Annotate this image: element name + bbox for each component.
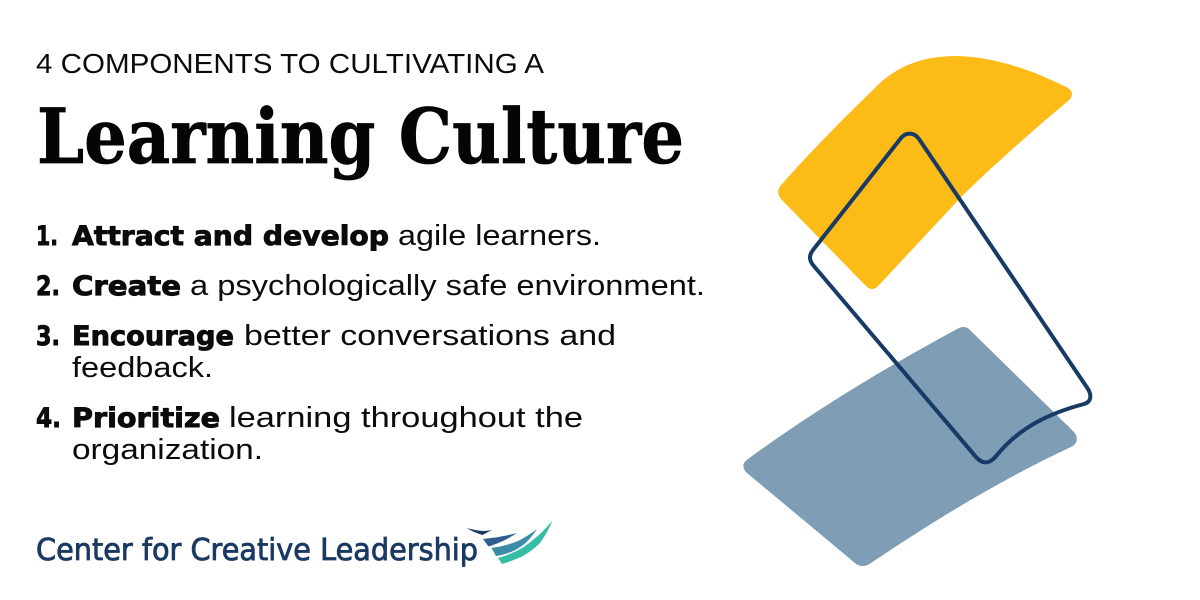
list item 2: a psychologically safe environment.: [190, 270, 705, 302]
heading: eyebrow: 4 COMPONENTS TO CULTIVATING A: [36, 48, 544, 79]
list item 1: Attract and develop: [72, 221, 389, 252]
graphic: abstract shapes: [743, 56, 1090, 566]
list item 3: [36, 320, 616, 384]
list item 1: [36, 220, 601, 252]
numbered list: [36, 220, 705, 466]
list item 2: 2.: [36, 271, 60, 302]
shape: navy outline: [810, 134, 1090, 462]
list item 4: organization.: [72, 434, 263, 466]
list item 3: better conversations and: [244, 320, 616, 352]
list item 3: Encourage: [72, 321, 234, 352]
logo icon: swoosh: [466, 520, 552, 564]
list item 2: Create: [72, 271, 181, 302]
shape: slate blue: [743, 327, 1077, 566]
list item 4: [36, 402, 583, 466]
list item 4: 4.: [36, 403, 61, 434]
list item 1: 1.: [36, 221, 58, 252]
shape: yellow: [778, 56, 1072, 289]
list item 2: [36, 270, 705, 302]
list item 3: feedback.: [72, 352, 213, 384]
list item 1: agile learners.: [398, 220, 601, 252]
logo: Center for Creative Leadership: [36, 520, 552, 568]
logo wordmark: Center for Creative Leadership: [36, 533, 478, 568]
heading: title: Learning Culture: [37, 92, 684, 181]
list item 4: Prioritize: [72, 403, 220, 434]
list item 3: 3.: [36, 321, 60, 352]
list item 4: learning throughout the: [229, 402, 583, 434]
